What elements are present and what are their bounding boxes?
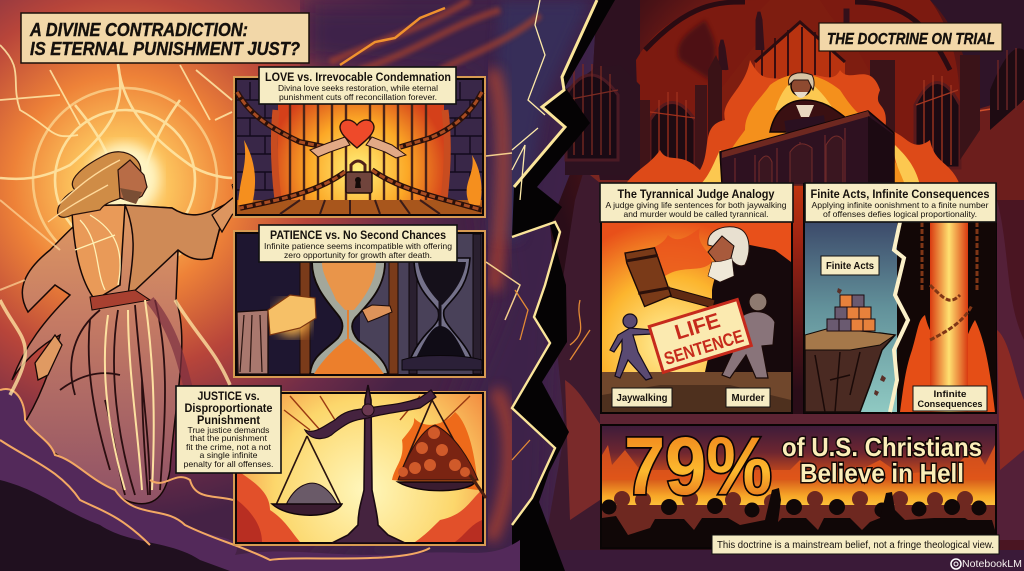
fire cell — [278, 95, 444, 200]
jaywalking label — [612, 388, 672, 407]
infinite consequences label: Infinite — [934, 389, 966, 400]
justice caption box: Punishment — [197, 415, 260, 427]
doctrine on trial banner — [819, 23, 1002, 51]
left pan — [276, 436, 341, 505]
life sentence stamp: SENTENCE — [662, 326, 746, 369]
justice caption box: that the punishment — [190, 433, 268, 443]
arms — [310, 137, 406, 158]
robed arm — [237, 310, 268, 374]
block pile — [827, 295, 875, 331]
statistic label: of U.S. Christians — [782, 432, 982, 462]
crack with lightning — [512, 0, 615, 571]
panel: tyrannical judge analogy — [600, 183, 793, 414]
finite acts label — [821, 256, 879, 275]
justice caption box: penalty for all offenses. — [184, 459, 274, 469]
bars — [290, 100, 426, 206]
title banner — [21, 13, 309, 63]
right windows — [915, 82, 960, 168]
patience caption box: PATIENCE vs. No Second Chances — [270, 230, 446, 242]
judge caption box — [600, 183, 793, 222]
panel: patience vs no second chances — [233, 225, 486, 378]
infinite consequences label — [913, 386, 987, 411]
cathedral architecture — [565, 0, 1024, 183]
scale — [332, 385, 405, 543]
judge caption box: A judge giving life sentences for both jaywalking — [606, 200, 787, 210]
flames around skulls — [392, 412, 478, 490]
finite acts label: Finite Acts — [826, 261, 874, 272]
judge at the bench — [720, 73, 894, 185]
title text — [29, 20, 300, 59]
patience caption box: zero opportunity for growth after death. — [284, 250, 432, 260]
chains — [922, 222, 977, 340]
flames behind the judge — [625, 60, 960, 185]
panel: 79 percent statistic — [600, 421, 999, 554]
padlock — [351, 161, 365, 173]
heart — [340, 120, 374, 148]
panel: love vs condemnation — [233, 67, 486, 218]
falling rocks — [837, 288, 886, 396]
79 percent figure: 79% — [624, 421, 772, 512]
finite caption box — [805, 183, 996, 222]
love caption box: LOVE vs. Irrevocable Condemnation — [265, 72, 451, 84]
finite caption box: Applying infinite oonishment to a finite number — [812, 200, 989, 210]
back row of crowd — [602, 491, 995, 547]
dark hourglass — [410, 258, 472, 360]
murder label: Murder — [732, 393, 765, 404]
justice caption box — [176, 386, 281, 473]
justice caption box: fit the crime, not a not — [186, 442, 272, 452]
title text: A DIVINE CONTRADICTION: — [29, 20, 248, 40]
red cloud corners — [237, 470, 482, 542]
floor — [237, 200, 482, 214]
infinite consequences label: Consequences — [918, 399, 982, 410]
halo and rays — [0, 45, 232, 272]
chains — [237, 92, 482, 210]
defendant — [722, 293, 775, 378]
title text: IS ETERNAL PUNISHMENT JUST? — [30, 39, 300, 59]
justice caption box: True justice demands — [188, 425, 270, 435]
stick figure — [610, 314, 654, 380]
cliff — [805, 333, 895, 412]
note callout — [712, 535, 999, 554]
skull heap — [398, 425, 478, 480]
love caption box — [259, 67, 456, 104]
statistic label — [782, 432, 982, 488]
judge caption box: and murder would be called tyrannical. — [624, 209, 768, 219]
justice caption box: a single infinite — [200, 450, 258, 460]
flame silhouette — [602, 445, 995, 480]
judge caption box: The Tyrannical Judge Analogy — [618, 189, 775, 201]
life sentence stamp — [649, 300, 751, 372]
love caption box: punishment cuts off reconcillation forever. — [279, 92, 437, 102]
note callout: This doctrine is a mainstream belief, not a fringe theological view. — [717, 540, 994, 551]
front row of crowd — [602, 488, 995, 547]
figure: robed Christ reaching out — [12, 152, 262, 504]
justice caption box: Disproportionate — [184, 403, 272, 415]
murder label — [726, 388, 770, 407]
jaywalking label: Jaywalking — [616, 393, 668, 404]
floor — [602, 372, 791, 412]
patience caption box: Infinite patience seems incompatible with offering — [264, 241, 452, 251]
panel: justice vs disproportionate punishment — [176, 385, 486, 546]
patience caption box — [259, 225, 457, 262]
purple storm clouds — [0, 200, 520, 571]
love caption box: Divina love seeks restoration, while eternal — [278, 83, 438, 93]
finite caption box: Finite Acts, Infinite Consequences — [810, 189, 990, 201]
life sentence stamp: LIFE — [672, 309, 723, 345]
dark judge — [705, 245, 791, 372]
jagged divider — [890, 222, 908, 412]
justice caption box: JUSTICE vs. — [198, 391, 260, 403]
finite caption box: of offenses defies logical proportionality. — [823, 209, 977, 219]
left windows — [566, 75, 618, 160]
panel: finite acts, infinite consequences — [803, 183, 997, 414]
sand hourglass — [310, 262, 388, 374]
rays — [284, 396, 470, 430]
flames around gavel — [640, 228, 712, 280]
brick walls — [237, 82, 482, 190]
small reaching hand — [362, 305, 392, 322]
doctrine on trial banner: THE DOCTRINE ON TRIAL — [827, 31, 995, 48]
background: courtroom right side — [530, 0, 1024, 571]
frame posts — [300, 234, 398, 374]
flames at sides — [238, 140, 482, 205]
fire column — [900, 315, 995, 412]
statistic label: Believe in Hell — [800, 458, 964, 488]
NotebookLM watermark: NotebookLM — [962, 558, 1022, 570]
gavel — [625, 246, 715, 308]
